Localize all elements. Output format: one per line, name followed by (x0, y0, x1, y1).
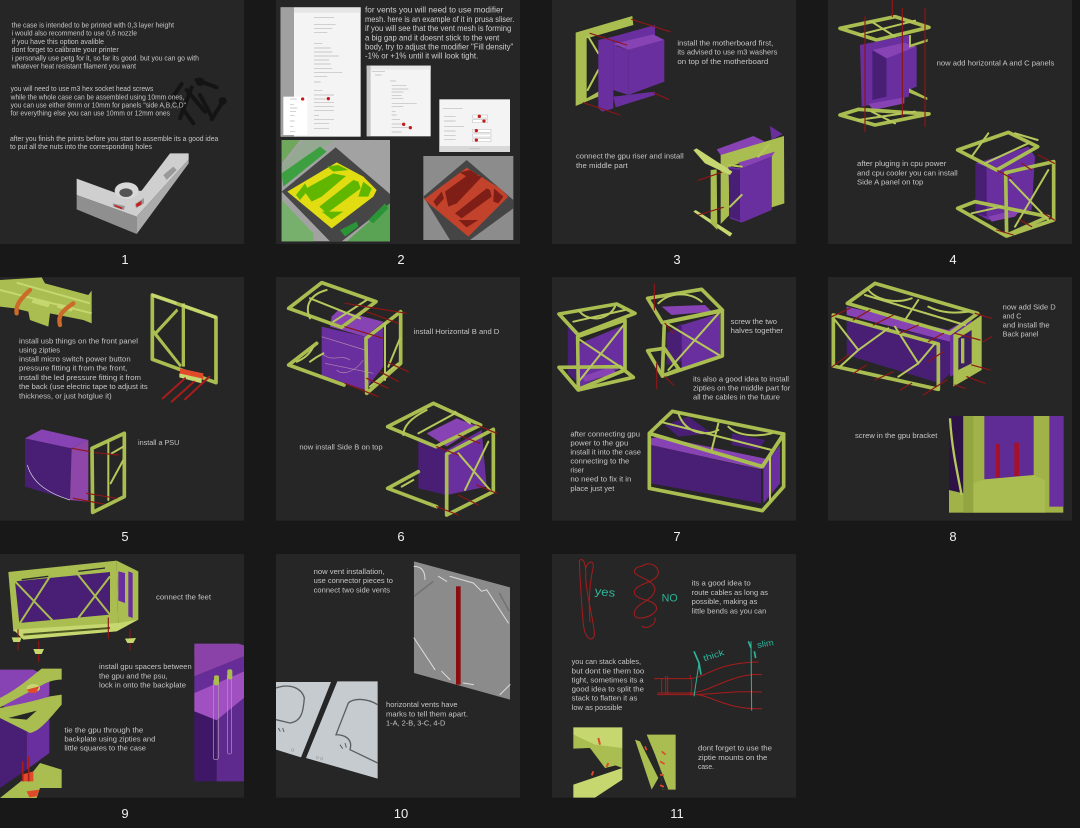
text: tie gpu: backplate using zipties and (64, 735, 155, 744)
text: usb, switch and led: the back (use electric tape to adjust its (19, 382, 148, 391)
text: tie gpu: tie the gpu through the (64, 725, 143, 734)
text: screw halves: halves together (731, 326, 783, 335)
text: stack cables: tight, sometimes its a (572, 675, 644, 684)
text: stack cables: good idea to split the (572, 685, 644, 694)
text: spacers (99, 662, 192, 689)
illustration: gpu bracket closeup (949, 416, 1063, 513)
text: stack cables: low as possible (572, 703, 622, 712)
text: vent installation: use connector pieces to (314, 576, 393, 585)
screenshot: object list menu (367, 66, 431, 136)
illustration: right half (648, 284, 722, 388)
text: horizontal vent marks: horizontal vents have (386, 700, 458, 709)
step number 5: 5 (121, 529, 129, 544)
text: print settings: if you have this option avalible (12, 39, 104, 46)
text: gpu riser: the middle part (576, 161, 629, 170)
panel 11: cable routing (552, 554, 796, 798)
text: print settings (11, 23, 199, 70)
text: ziptie mounts: dont forget to use the (698, 744, 772, 753)
text: print settings: i personally use petg for it, so far its good. but you can go with (12, 55, 199, 62)
illustration: PSU and frame (25, 429, 124, 512)
text: print settings: the case is intended to be printed with 0,3 layer height (12, 23, 174, 30)
step number 4: 4 (949, 252, 957, 267)
screenshot: context menu (281, 7, 361, 137)
text: spacers: lock in onto the backplate (99, 680, 186, 689)
text: horizontal vent marks: marks to tell them apart. (386, 709, 468, 718)
illustration: ziptie mounts left (573, 727, 622, 798)
panel 10: vents (276, 554, 520, 798)
text: ziptie mounts: ziptie mounts on the (698, 753, 767, 762)
text: side A: and cpu cooler you can install (857, 168, 958, 177)
text: nuts: to put all the nuts into the corresponding holes (10, 144, 152, 151)
text: gpu: place just yet (570, 484, 615, 493)
text: motherboard (677, 39, 777, 66)
text: usb, switch and led: install usb things on the front panel (19, 336, 138, 345)
text: print settings: whatever heat resistant filament you want (11, 63, 136, 70)
text: back panel (1003, 302, 1056, 339)
text: side B: now install Side B on top (299, 443, 383, 452)
text: gpu: riser (570, 466, 584, 475)
diagram: cable stack thick versus slim (654, 637, 774, 711)
text: back panel: and C (1003, 312, 1022, 321)
illustration: front panel with switch and LED (152, 293, 217, 402)
step number 10: 10 (394, 806, 408, 821)
text: vent installation: connect two side vents (314, 585, 390, 594)
step number 8: 8 (949, 529, 957, 544)
text: spacers: the gpu and the psu, (99, 671, 168, 680)
text: stack cables: you can stack cables, (572, 657, 641, 666)
text: side A: after pluging in cpu power (857, 159, 947, 168)
text: gpu (570, 429, 641, 493)
step number 7: 7 (673, 529, 681, 544)
panel 9: feet and gpu spacers (0, 554, 244, 798)
illustration: case with feet (8, 561, 138, 661)
text: motherboard: on top of the motherboard (677, 57, 768, 66)
text: horizontal B and D: install Horizontal B and D (414, 327, 500, 336)
text: route cables: little bends as you can (692, 606, 766, 615)
text: gpu: after connecting gpu (570, 429, 640, 438)
illustration: cable route no (634, 564, 678, 627)
step number 3: 3 (673, 252, 681, 267)
panel 5: front panel and PSU (0, 277, 244, 521)
text: print settings: dont forget to calibrate your printer (12, 47, 119, 54)
text: zipties: zipties on the middle part for (693, 383, 791, 392)
text: vents (365, 5, 514, 61)
text: nuts: after you finish the prints before you start to assemble its a good idea (10, 136, 218, 143)
text: back panel: Back panel (1003, 330, 1039, 339)
text: vent installation: now vent installation, (314, 567, 385, 576)
text: horizontal vent marks: 1-A, 2-B, 3-C, 4-D (386, 718, 446, 727)
illustration: gpu spacers (194, 644, 244, 781)
text: tie gpu: little squares to the case (64, 744, 146, 753)
step number 6: 6 (397, 529, 405, 544)
text: screw halves: screw the two (731, 317, 777, 326)
text: usb, switch and led: pressure fitting it from the front, (19, 364, 127, 373)
step number 9: 9 (121, 806, 129, 821)
panel 4: horizontal panels and side A (828, 0, 1072, 244)
text: usb, switch and led: install the led pressure fitting it from (19, 373, 141, 382)
text: ziptie mounts (698, 744, 772, 771)
icon: pile of black screws (168, 77, 227, 123)
image: yellow and green slicer preview (282, 140, 390, 241)
text: route cables: route cables as long as (692, 588, 768, 597)
text: stack cables: stack to flatten it as (572, 694, 637, 703)
text: nuts (10, 136, 218, 151)
handwritten slim: slim (756, 637, 774, 650)
text: screws (10, 86, 186, 118)
text: vents: for vents you will need to use modifier (365, 5, 504, 15)
text: back panel: now add Side D (1003, 302, 1056, 311)
text: vents: -1% or +1% until it will look tight. (365, 51, 478, 61)
text: side A (857, 159, 958, 186)
text: horizontal panels: now add horizontal A and C panels (937, 59, 1055, 68)
panel 8: side D, C, back panel, gpu bracket (828, 277, 1072, 521)
panel 6: horizontal B and D, side B (276, 277, 520, 521)
image: red slicer preview (423, 156, 513, 240)
text: screw halves (731, 317, 783, 335)
text: gpu: connecting to the (570, 457, 629, 466)
illustration: assembled case with GPU (649, 411, 784, 511)
step number 2: 2 (397, 252, 405, 267)
handwritten yes: yes (594, 586, 616, 600)
text: gpu: no need to fix it in (570, 475, 631, 484)
illustration: ziptie mounts right (635, 735, 676, 790)
illustration: grey corner bracket with nut slots (77, 153, 189, 234)
step number 11: 11 (670, 806, 684, 821)
text: usb, switch and led: install micro switch power button (19, 355, 131, 364)
panel 3: motherboard and middle part (552, 0, 796, 244)
text: zipties: its also a good idea to install (693, 374, 789, 383)
text: ziptie mounts: case. (698, 762, 714, 771)
text: route cables (692, 579, 768, 615)
text: zipties (693, 374, 791, 402)
illustration: motherboard on frame (576, 16, 670, 115)
text: screws: you can use either 8mm or 10mm for panels "side A,B,C,D" (11, 103, 186, 110)
illustration: side D, C and back panel (832, 283, 992, 395)
illustration: side A panel installed (958, 132, 1054, 236)
panel 2: modifier mesh in slicer (276, 0, 520, 244)
screenshot: fill density settings (439, 99, 510, 152)
illustration: horizontal A and C panels (840, 0, 929, 132)
text: stack cables: but dont tie them too (572, 666, 644, 675)
text: vents: a big gap and it doesnt stick to the vent (365, 32, 500, 42)
text: gpu: install it into the case (570, 447, 641, 456)
illustration: horizontal B and D (289, 283, 408, 397)
text: usb, switch and led: using zipties (19, 345, 60, 354)
text: motherboard: install the motherboard first, (677, 39, 773, 48)
step number 1: 1 (121, 252, 129, 267)
handwritten thick: thick (702, 647, 726, 663)
handwritten no: NO (662, 592, 678, 604)
text: screws: for everything else you can use 10mm or 12mm ones (11, 111, 170, 118)
text: back panel: and install the (1003, 320, 1050, 329)
text: side A: Side A panel on top (857, 177, 923, 186)
panel 7: joining halves and GPU (552, 277, 796, 521)
text: usb, switch and led (19, 336, 148, 400)
illustration: horizontal vents with marks (276, 681, 378, 779)
text: gpu riser (576, 152, 684, 170)
text: gpu riser: connect the gpu riser and install (576, 152, 684, 161)
text: vents: body, try to adjust the modifier "Fill density" (365, 41, 513, 51)
text: stack cables (572, 657, 644, 712)
text: horizontal vent marks (386, 700, 468, 727)
text: route cables: possible, making as (692, 597, 757, 606)
illustration: middle part attached (693, 126, 784, 237)
text: print settings: i would also recommend to use 0,6 nozzle (12, 31, 137, 38)
text: vents: mesh. here is an example of it in prusa sliser. (365, 14, 514, 24)
text: vents: if you will see that the vent mesh is forming (365, 23, 512, 33)
text: bracket: screw in the gpu bracket (855, 431, 938, 440)
illustration: side vents joined by connector (414, 561, 510, 700)
illustration: cable route yes (579, 559, 616, 639)
illustration: front panel with zipties (0, 277, 92, 327)
illustration: left half (559, 304, 635, 390)
text: tie gpu (64, 725, 155, 753)
text: motherboard: its advised to use m3 washers (677, 48, 777, 57)
illustration: zipties through backplate (0, 669, 62, 798)
text: gpu: power to the gpu (570, 438, 628, 447)
panel 1: print settings (0, 0, 244, 244)
text: usb, switch and led: thickness, or just hotglue it) (19, 391, 112, 400)
text: route cables: its a good idea to (692, 579, 751, 588)
illustration: side B installed (388, 403, 497, 515)
text: screws: while the whole case can be assembled using 10mm ones, (10, 94, 184, 101)
text: feet: connect the feet (156, 593, 212, 602)
text: vent installation (314, 567, 393, 594)
text: screws: you will need to use m3 hex socket head screws (11, 86, 154, 93)
text: zipties: all the cables in the future (693, 393, 780, 402)
text: PSU: install a PSU (138, 438, 179, 447)
text: spacers: install gpu spacers between (99, 662, 192, 671)
